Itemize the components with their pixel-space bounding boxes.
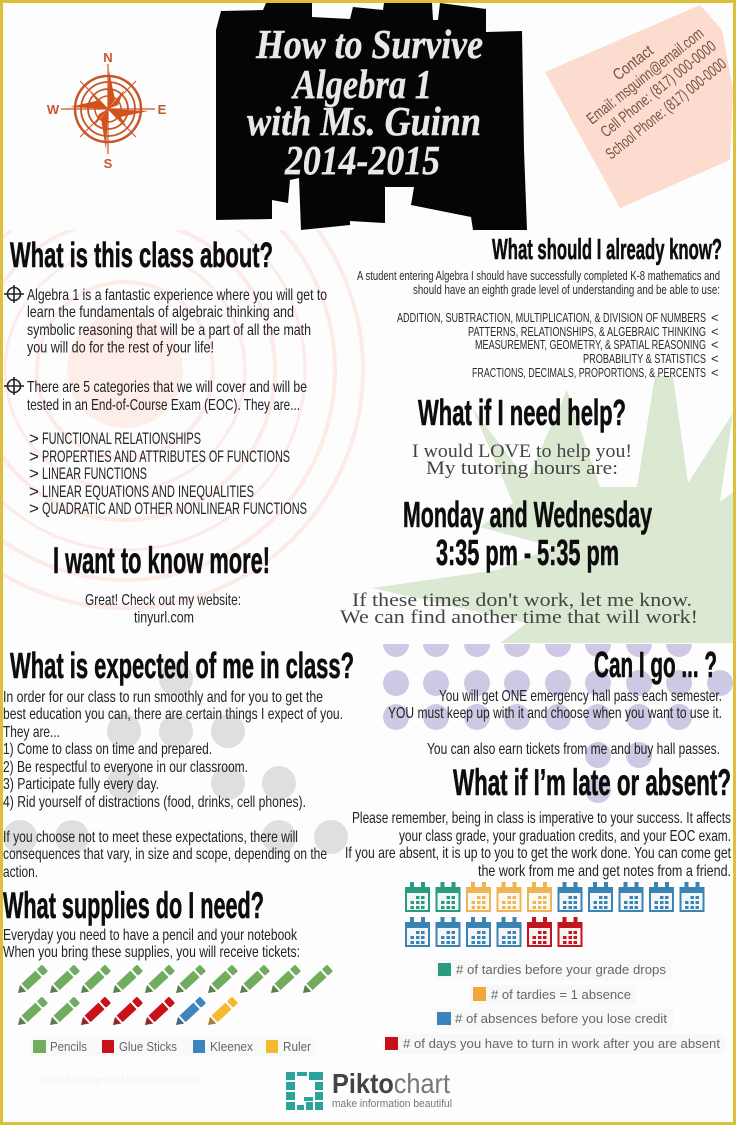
- panel: i want to know more: [53, 540, 270, 626]
- background: purple dots: [383, 631, 733, 803]
- list: prerequisite skills: [397, 310, 719, 380]
- text block: expectations: 4) Rid yourself of distractions (food, drinks, cell phones).: [3, 794, 306, 811]
- text block: expectations: 1) Come to class on time and prepared.: [3, 741, 212, 758]
- icon: compass: E: [158, 102, 167, 117]
- list: exam categories: QUADRATIC AND OTHER NONLINEAR FUNCTIONS: [42, 499, 307, 518]
- list: exam categories: PROPERTIES AND ATTRIBUTES OF FUNCTIONS: [42, 447, 290, 466]
- title: 2014-2015: [284, 137, 440, 183]
- text block: algebra intro: you will do for the rest of your life!: [27, 340, 214, 356]
- icon: piktochart mark: [286, 1072, 323, 1110]
- text block: tutoring hours: 3:35 pm - 5:35 pm: [436, 532, 619, 573]
- text block: other times: [340, 591, 698, 628]
- panel: can i go: [388, 644, 722, 758]
- panel: what supplies do i need: [3, 885, 333, 1056]
- text block: offer to help: My tutoring hours are:: [426, 459, 618, 479]
- title: with Ms. Guinn: [247, 98, 481, 144]
- text block: expectations: [3, 689, 343, 881]
- icon: compass: W: [47, 102, 60, 117]
- list: exam categories: >: [29, 447, 39, 466]
- text block: expectations: If you choose not to meet these expectations, there will: [3, 829, 298, 846]
- legend: pencils: [30, 1037, 315, 1056]
- text block: prerequisites intro: [357, 268, 720, 297]
- text block: supplies: [3, 927, 300, 961]
- text block: expectations: best education you can, there are certain things I expect of you.: [3, 706, 343, 723]
- title banner: black brush strokes: [216, 3, 527, 230]
- tagline: make information beautiful: [332, 1098, 452, 1110]
- text block: other times: If these times don't work, let me know.: [352, 591, 692, 611]
- panel: what should i already know: [357, 234, 722, 380]
- title: Algebra 1: [290, 61, 432, 107]
- text block: expectations: In order for our class to run smoothly and for you to get the: [3, 689, 323, 706]
- list: exam categories: >: [29, 499, 39, 518]
- text block: tutoring hours: [403, 494, 652, 573]
- text block: expectations: consequences that vary, in size and scope, depending on the: [3, 846, 327, 863]
- list: prerequisite skills: <: [711, 324, 719, 339]
- text block: algebra intro: learn the fundamentals of algebraic thinking and: [27, 304, 294, 321]
- text block: expectations: 3) Participate fully every day.: [3, 776, 159, 793]
- list: prerequisite skills: <: [711, 337, 719, 352]
- text block: expectations: They are...: [3, 724, 60, 741]
- text block: algebra intro: [27, 287, 327, 356]
- list: prerequisite skills: <: [711, 351, 719, 366]
- list: exam categories: [29, 429, 307, 518]
- legend: calendars: # of tardies = 1 absence: [491, 987, 631, 1002]
- text block: five categories: tested in an End-of-Course Exam (EOC). They are...: [27, 397, 300, 414]
- heading: i want to know more: I want to know more!: [53, 540, 270, 581]
- list: exam categories: >: [29, 464, 39, 483]
- panel: what if i need help: [340, 392, 698, 628]
- list: prerequisite skills: <: [711, 310, 719, 325]
- legend: pencils: Glue Sticks: [119, 1039, 177, 1054]
- list: prerequisite skills: <: [711, 365, 719, 380]
- background: green star: [372, 376, 733, 643]
- text block: website: Great! Check out my website:: [85, 592, 241, 609]
- legend: pencils: Ruler: [283, 1039, 312, 1054]
- list: exam categories: >: [29, 429, 39, 448]
- text block: supplies: Everyday you need to have a pencil and your notebook: [3, 927, 298, 944]
- heading: what is expected of me: What is expected of me in class?: [10, 645, 354, 686]
- text block: website: [85, 592, 241, 626]
- heading: what is this class about: What is this class about?: [10, 236, 273, 275]
- background: grey dots: [3, 662, 348, 854]
- background: concentric rings: [3, 230, 365, 610]
- legend: calendars: # of absences before you lose credit: [455, 1011, 667, 1026]
- text block: offer to help: I would LOVE to help you!: [412, 442, 632, 462]
- text block: hall passes: [388, 688, 722, 758]
- legend: calendars: [383, 960, 725, 1054]
- title: [247, 21, 483, 183]
- text block: offer to help: [412, 442, 632, 479]
- pictogram: calendars: [405, 882, 704, 946]
- icon: compass: S: [104, 156, 113, 171]
- panel: what is this class about: [4, 236, 327, 518]
- text block: supplies: When you bring these supplies, you will receive tickets:: [3, 944, 300, 961]
- text block: attendance: [345, 810, 731, 880]
- icon: compass: N: [103, 50, 113, 65]
- panel: what is expected of me: [3, 645, 354, 881]
- icon: compass: [47, 50, 167, 171]
- text block: algebra intro: Algebra 1 is a fantastic experience where you will get to: [27, 287, 327, 304]
- text block: five categories: There are 5 categories that we will cover and will be: [27, 379, 307, 396]
- list: exam categories: LINEAR EQUATIONS AND INEQUALITIES: [42, 482, 254, 501]
- wordmark: Piktochart: [332, 1068, 450, 1099]
- heading: supplies: What supplies do I need?: [3, 885, 264, 926]
- icon: crosshair bullet one: [4, 285, 24, 303]
- list: exam categories: LINEAR FUNCTIONS: [42, 464, 147, 483]
- logo: piktochart: [286, 1068, 452, 1110]
- legend: pencils: Pencils: [50, 1039, 87, 1054]
- contact tag: [545, 5, 733, 208]
- pictogram: pencils: [15, 964, 333, 1028]
- text block: expectations: 2) Be respectful to everyone in our classroom.: [3, 759, 248, 776]
- text block: algebra intro: symbolic reasoning that will be a part of all the math: [27, 322, 311, 339]
- contact tag: Contact: [610, 42, 657, 84]
- text block: five categories: [27, 379, 307, 414]
- legend: pencils: Kleenex: [210, 1039, 253, 1054]
- text block: other times: We can find another time that will work!: [340, 608, 698, 628]
- panel: what if i'm late or absent: [345, 762, 731, 1054]
- faint watermark url: www.heritagechristiancollege.com: [39, 1074, 200, 1086]
- icon: crosshair bullet two: [4, 377, 24, 395]
- text block: website: tinyurl.com: [134, 610, 194, 626]
- text block: expectations: action.: [3, 864, 38, 881]
- list: exam categories: >: [29, 482, 39, 501]
- title: How to Survive: [255, 21, 483, 67]
- legend: calendars: # of days you have to turn in work after you are absent: [403, 1036, 720, 1051]
- legend: calendars: # of tardies before your grade drops: [456, 962, 667, 977]
- list: exam categories: FUNCTIONAL RELATIONSHIPS: [42, 429, 201, 448]
